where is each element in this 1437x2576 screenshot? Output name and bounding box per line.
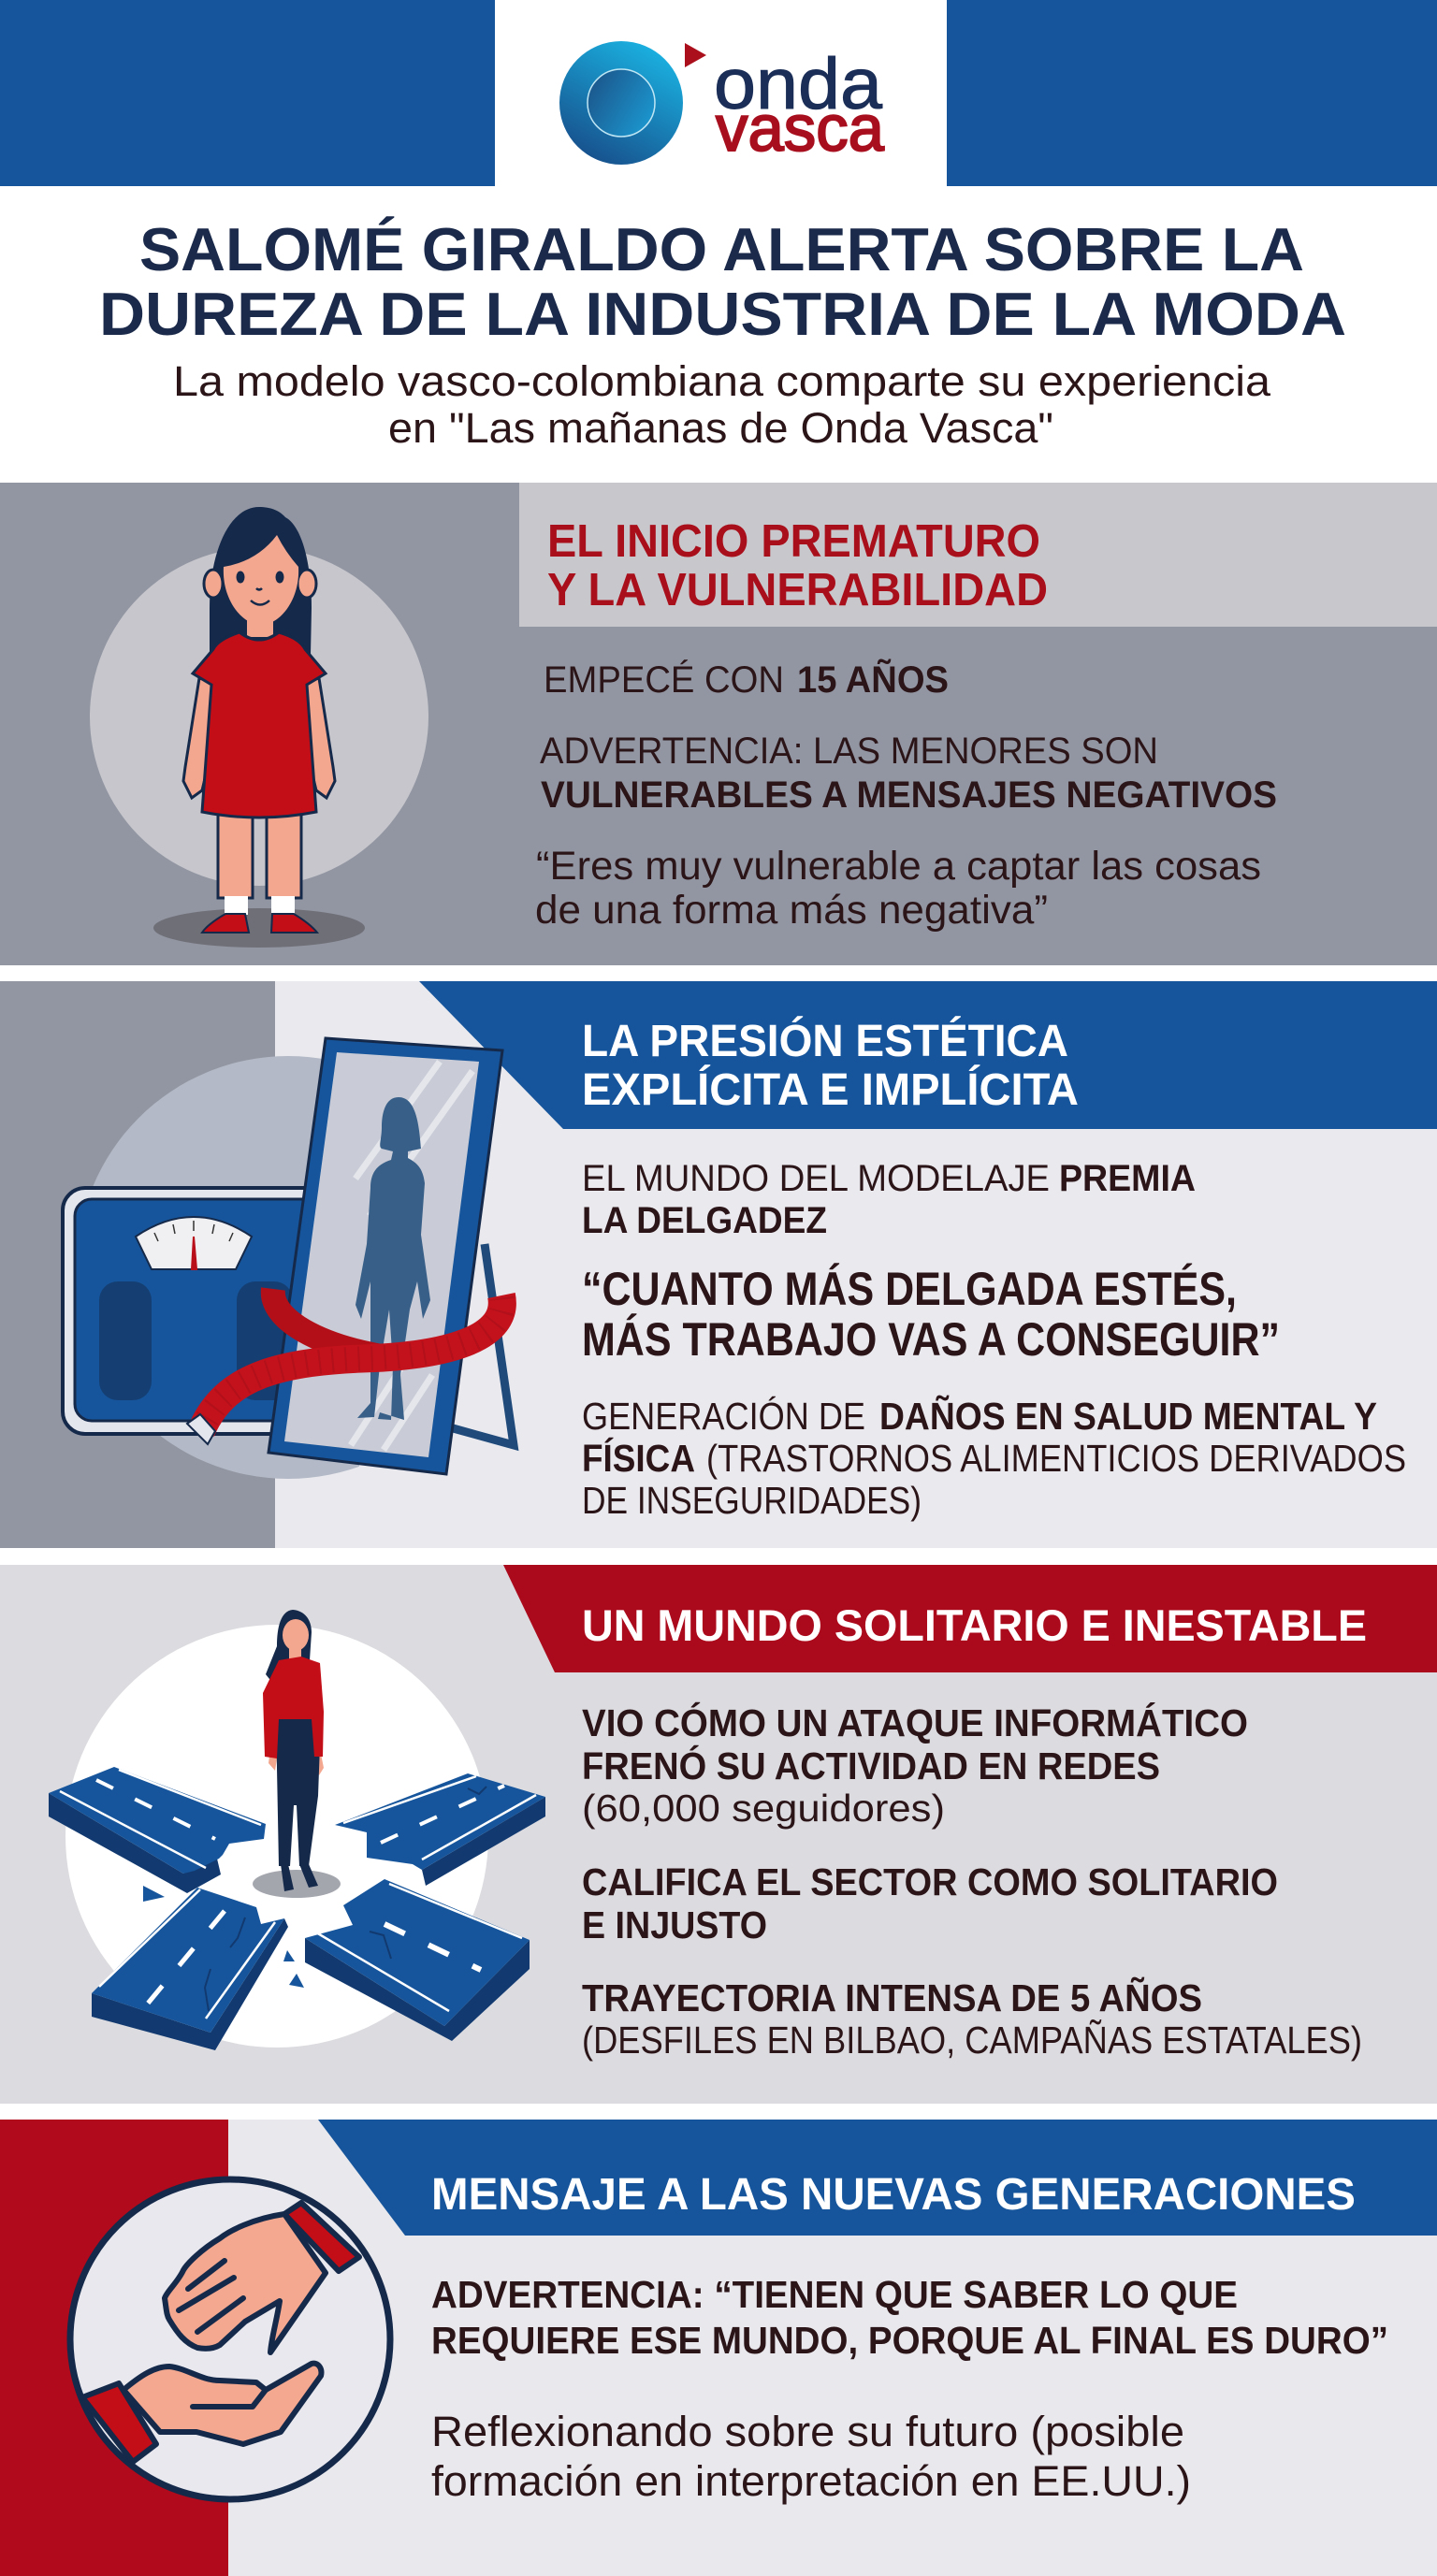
logo: Onda Vasca: onda xyxy=(714,44,882,124)
text: advertencia: VULNERABLES A MENSAJES NEGATIVOS xyxy=(541,774,1277,816)
text: advertencia xyxy=(431,2273,1388,2362)
text: quote: de una forma más negativa” xyxy=(535,888,1048,933)
text: quote: “CUANTO MÁS DELGADA ESTÉS, xyxy=(582,1263,1237,1315)
road SW xyxy=(92,1888,288,2050)
text: trayectoria xyxy=(582,1976,1362,2062)
panel: mensaje a las nuevas generaciones xyxy=(0,2120,1437,2576)
text: advertencia: ADVERTENCIA: LAS MENORES SON xyxy=(540,731,1158,772)
title xyxy=(99,215,1346,348)
heading: EXPLÍCITA E IMPLÍCITA xyxy=(582,1064,1079,1115)
text: advertencia xyxy=(540,731,1277,816)
text: reflexionando: formación en interpretación en EE.UU.) xyxy=(431,2457,1191,2505)
text: reflexionando xyxy=(431,2408,1191,2505)
panel: la presión estética xyxy=(0,981,1437,1548)
text: advertencia: REQUIERE ESE MUNDO, PORQUE AL FINAL ES DURO” xyxy=(431,2319,1388,2362)
text: daños en salud: DAÑOS EN SALUD MENTAL Y xyxy=(879,1395,1377,1438)
text: reflexionando: Reflexionando sobre su futuro (posible xyxy=(431,2408,1184,2455)
panel: un mundo solitario xyxy=(0,1565,1437,2104)
text: ataque informático: FRENÓ SU ACTIVIDAD EN REDES xyxy=(582,1744,1160,1787)
text: empecé con 15 años xyxy=(544,658,949,701)
banner xyxy=(419,981,1437,1129)
text: modelaje premia la delgadez xyxy=(582,1158,1196,1241)
text: daños en salud: FÍSICA xyxy=(582,1437,695,1480)
banner xyxy=(318,2120,1437,2236)
text: modelaje premia la delgadez: LA DELGADEZ xyxy=(582,1200,827,1241)
logo: Onda Vasca: vasca xyxy=(716,92,884,165)
heading: LA PRESIÓN ESTÉTICA xyxy=(582,1015,1068,1066)
heading xyxy=(582,1015,1079,1115)
text: daños en salud xyxy=(582,1395,1406,1522)
heading: Y LA VULNERABILIDAD xyxy=(547,565,1048,615)
text: modelaje premia la delgadez: PREMIA xyxy=(1059,1158,1196,1199)
header band xyxy=(0,0,1437,186)
text: modelaje premia la delgadez: EL MUNDO DEL MODELAJE xyxy=(582,1158,1050,1199)
text: trayectoria: TRAYECTORIA INTENSA DE 5 AÑOS xyxy=(582,1976,1202,2019)
road NE xyxy=(335,1773,545,1886)
text: quote: “Eres muy vulnerable a captar las cosas xyxy=(536,844,1261,889)
text: solitario e injusto: CALIFICA EL SECTOR COMO SOLITARIO xyxy=(582,1860,1278,1903)
lower hand xyxy=(82,2364,321,2462)
text: advertencia: ADVERTENCIA: “TIENEN QUE SABER LO QUE xyxy=(431,2273,1238,2316)
subtitle: La modelo vasco-colombiana comparte su experiencia xyxy=(173,357,1271,405)
title: SALOMÉ GIRALDO ALERTA SOBRE LA xyxy=(139,215,1304,283)
title: DUREZA DE LA INDUSTRIA DE LA MODA xyxy=(99,280,1346,348)
road NW xyxy=(49,1767,266,1893)
icon: woman on broken roads xyxy=(49,1610,545,2050)
subtitle: en "Las mañanas de Onda Vasca" xyxy=(388,404,1053,452)
text: daños en salud: DE INSEGURIDADES) xyxy=(582,1479,922,1522)
text: solitario e injusto: E INJUSTO xyxy=(582,1903,767,1946)
panel: el inicio prematuro xyxy=(0,483,1437,965)
icon: scale, mirror and tape xyxy=(63,1038,514,1479)
heading: EL INICIO PREMATURO xyxy=(547,516,1040,567)
text: ataque informático xyxy=(582,1701,1248,1830)
heading: MENSAJE A LAS NUEVAS GENERACIONES xyxy=(431,2170,1356,2220)
upper hand xyxy=(165,2203,359,2352)
subtitle xyxy=(173,357,1271,452)
text: solitario e injusto xyxy=(582,1860,1278,1946)
heading xyxy=(547,516,1048,615)
text: quote: MÁS TRABAJO VAS A CONSEGUIR” xyxy=(582,1313,1280,1366)
text: empecé con 15 años: EMPECÉ CON xyxy=(544,658,784,701)
text: quote xyxy=(582,1263,1280,1366)
icon: girl in red dress xyxy=(90,507,428,948)
icon: two hands in circle xyxy=(70,2179,390,2499)
heading: UN MUNDO SOLITARIO E INESTABLE xyxy=(582,1600,1367,1650)
banner xyxy=(503,1565,1437,1672)
text: ataque informático: VIO CÓMO UN ATAQUE INFORMÁTICO xyxy=(582,1701,1248,1744)
text: quote xyxy=(535,844,1261,933)
text: empecé con 15 años: 15 AÑOS xyxy=(797,658,949,701)
text: ataque informático: (60,000 seguidores) xyxy=(582,1787,945,1830)
woman xyxy=(263,1610,324,1891)
logo: Onda Vasca xyxy=(559,41,884,165)
road SE xyxy=(305,1879,530,2041)
text: daños en salud: GENERACIÓN DE xyxy=(582,1395,865,1438)
